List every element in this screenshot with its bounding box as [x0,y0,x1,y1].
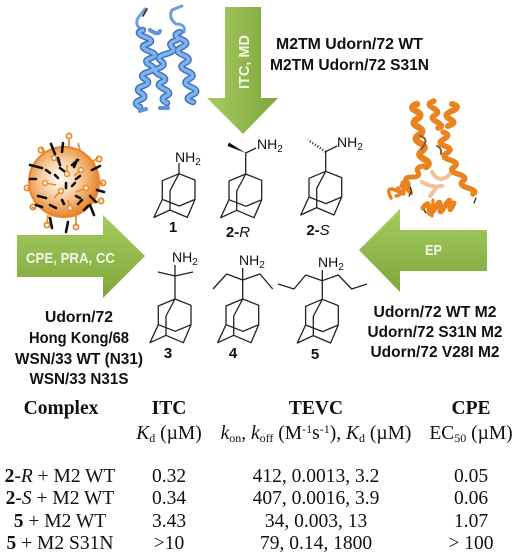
molecule: compound 2-R: NH [257,136,277,152]
icon: influenza virus particle [24,133,106,232]
molecule: compound 1 [154,149,201,236]
molecule: compound 4: NH [239,252,259,268]
label: 5: 5 [311,346,319,363]
text: virus strains: Udorn/72 [45,309,113,326]
table header row: K [135,423,150,444]
table row: 5 + M2 WT [14,511,488,532]
table header row: (M [273,423,302,444]
table row: 5 + M2 S31N: > 100 [448,533,494,554]
molecule: compound 5 [278,254,367,363]
table row: 5 + M2 WT: 34, 0.003, 13 [265,511,367,532]
label: 1: 1 [169,219,177,236]
table header row: off [260,431,273,445]
table header row: -1 [302,422,312,436]
molecule: compound 3 [150,249,198,362]
molecule: compound 5: NH [318,254,338,270]
table row: 2-S + M2 WT: 407, 0.0016, 3.9 [253,488,379,509]
text: M2 channel variants: Udorn/72 WT M2 [374,304,496,321]
table header row: d [149,431,155,445]
table header row: -1 [320,422,330,436]
molecule: compound 1: NH [175,149,195,165]
text: virus strains: Hong Kong/68 [29,330,129,347]
table header row: (µM) [466,423,513,444]
label: 3: 3 [164,345,172,362]
arrow: CPE, PRA, CC right [17,215,145,298]
table row: 5 + M2 S31N: >10 [154,533,184,554]
table row: 5 + M2 WT: 5 + M2 WT [14,511,106,532]
molecule: compound 4: 2 [259,260,265,271]
icon: orange full-length M2 helix bundle [389,101,476,216]
molecule: compound 3: NH [172,249,192,265]
text: M2TM constructs: M2TM Udorn/72 S31N [270,57,429,74]
table row: 2-R + M2 WT: 0.32 [152,466,186,487]
label: 4: 4 [229,345,238,362]
table row: 2-R + M2 WT: 412, 0.0013, 3.2 [253,466,379,487]
table row: 5 + M2 WT: 1.07 [454,511,488,532]
table header row: 50 [454,431,466,445]
text: M2TM constructs: M2TM Udorn/72 WT [276,36,424,53]
arrow label: ITC, MD: ITC, MD [236,35,253,89]
table row: 2-R + M2 WT [5,466,488,487]
table header row: k [251,423,260,444]
table header row: Complex [24,398,99,419]
table header row: d [359,431,365,445]
label: 2-R: 2-R [226,224,250,241]
table header row: ITC [152,398,186,419]
table header row: (µM) [365,423,411,444]
table header row: TEVC [289,398,343,419]
arrow: ITC, MD down [207,7,278,134]
table row: 2-S + M2 WT: 0.34 [152,488,186,509]
table row: 2-S + M2 WT: 0.06 [454,488,488,509]
table header row: on [229,431,241,445]
text: M2 channel variants: Udorn/72 V28I M2 [370,344,500,361]
text: M2 channel variants [368,304,502,361]
table row: 2-R + M2 WT: 0.05 [454,466,488,487]
arrow label: CPE, PRA, CC: CPE, PRA, CC [26,251,115,267]
table row: 2-S + M2 WT [6,488,488,509]
label: 2-S: 2-S [306,222,330,239]
icon: blue M2TM helix bundle [136,6,196,111]
text: M2 channel variants: Udorn/72 S31N M2 [368,324,502,341]
molecule: compound 1: 2 [195,157,201,168]
table header row: ), [330,423,346,444]
table row: 5 + M2 S31N: 79, 0.14, 1800 [260,533,372,554]
table header row: K [345,423,360,444]
table header row: EC [429,423,454,444]
arrow: EP left [359,209,487,292]
text: virus strains: WSN/33 N31S [30,371,128,388]
molecule: compound 2-S [301,134,363,239]
table header row: s [312,423,320,444]
molecule: compound 2-S: 2 [357,142,363,153]
table row: 2-S + M2 WT: 2-S + M2 WT [6,488,114,509]
table header row: CPE [452,398,490,419]
molecule: compound 3: 2 [192,257,198,268]
molecule: compound 2-R [221,136,283,241]
text: virus strains [15,309,143,388]
molecule: compound 2-R: 2 [277,144,283,155]
table: binding and antiviral data [5,398,513,554]
arrow label: EP: EP [425,242,442,259]
text: virus strains: WSN/33 WT (N31) [15,351,143,368]
table row: 5 + M2 S31N: 5 + M2 S31N [7,533,113,554]
molecule: compound 2-S: NH [337,134,357,150]
text: M2TM constructs [270,36,429,74]
table row: 5 + M2 S31N [7,533,494,554]
molecule: compound 4 [213,252,273,362]
table header row: k [221,423,230,444]
table row: 5 + M2 WT: 3.43 [152,511,186,532]
table header row: , [241,423,251,444]
molecule: compound 5: 2 [338,262,344,273]
table header row [24,398,513,445]
table row: 2-R + M2 WT: 2-R + M2 WT [5,466,116,487]
table header row: (µM) [155,423,202,444]
